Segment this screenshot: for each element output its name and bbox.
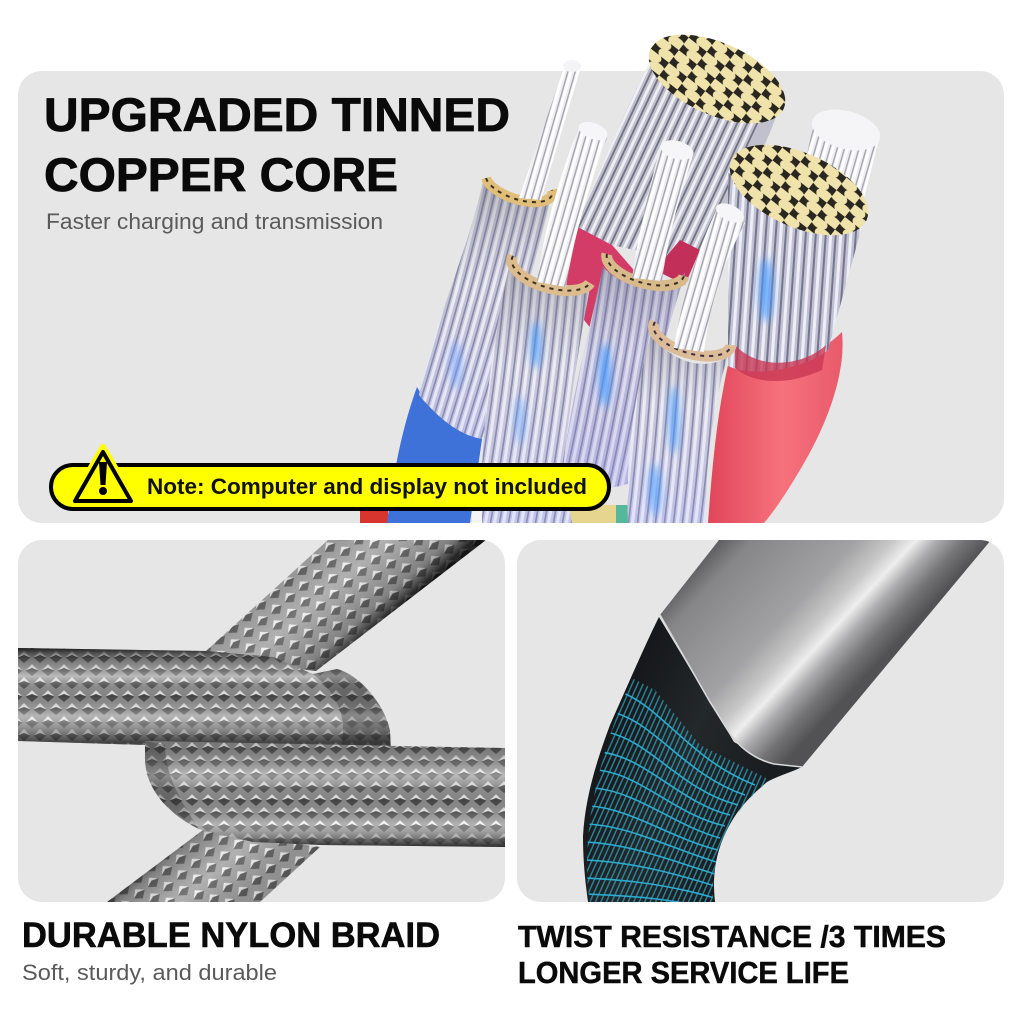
wire: blue sheath: [387, 387, 482, 523]
heading: twist resistance: TWIST RESISTANCE /3 TIMES: [518, 919, 946, 954]
icon: warning triangle: [70, 447, 136, 503]
wire: front strand bundle: [628, 203, 745, 523]
wire: middle right bundle: [564, 140, 694, 488]
wire: left strand bundle: [419, 60, 581, 439]
heading: upgraded tinned copper core: COPPER CORE: [44, 148, 398, 201]
heading: twist resistance: [518, 919, 946, 990]
illustration: connector and strain relief: [570, 540, 991, 910]
black strain relief: [583, 617, 802, 902]
wire: magenta sheath core: [566, 34, 786, 327]
upper diagonal cable: [206, 540, 486, 671]
lower diagonal cable: [107, 830, 320, 902]
wire: rear white bundle: [807, 110, 880, 197]
callout: note: Note: Computer and display not included: [147, 474, 587, 499]
heading: durable nylon braid: DURABLE NYLON BRAID: [22, 916, 440, 955]
subtitle: faster charging: Faster charging and transmission: [46, 209, 383, 234]
wire: middle left bundle: [482, 122, 608, 523]
panel: tinned copper core: [18, 71, 1004, 523]
wire: red sheath core: [708, 144, 868, 523]
illustration: copper core wires: [360, 34, 880, 523]
heading: upgraded tinned copper core: [44, 88, 510, 201]
sheath stubs behind note: [360, 505, 636, 523]
subtitle: soft, sturdy, durable: Soft, sturdy, and durable: [22, 960, 277, 985]
lower horizontal cable: [145, 741, 505, 847]
metal connector housing: [660, 540, 991, 767]
teal stress grid: [586, 678, 770, 902]
illustration: knotted braided cable: [18, 540, 505, 902]
heading: twist resistance: LONGER SERVICE LIFE: [518, 955, 849, 990]
panel: nylon braid: [18, 540, 505, 902]
upper horizontal cable: [18, 648, 391, 754]
heading: upgraded tinned copper core: UPGRADED TINNED: [44, 88, 510, 141]
callout: note: [51, 447, 609, 509]
panel: twist resistance: [517, 540, 1004, 902]
